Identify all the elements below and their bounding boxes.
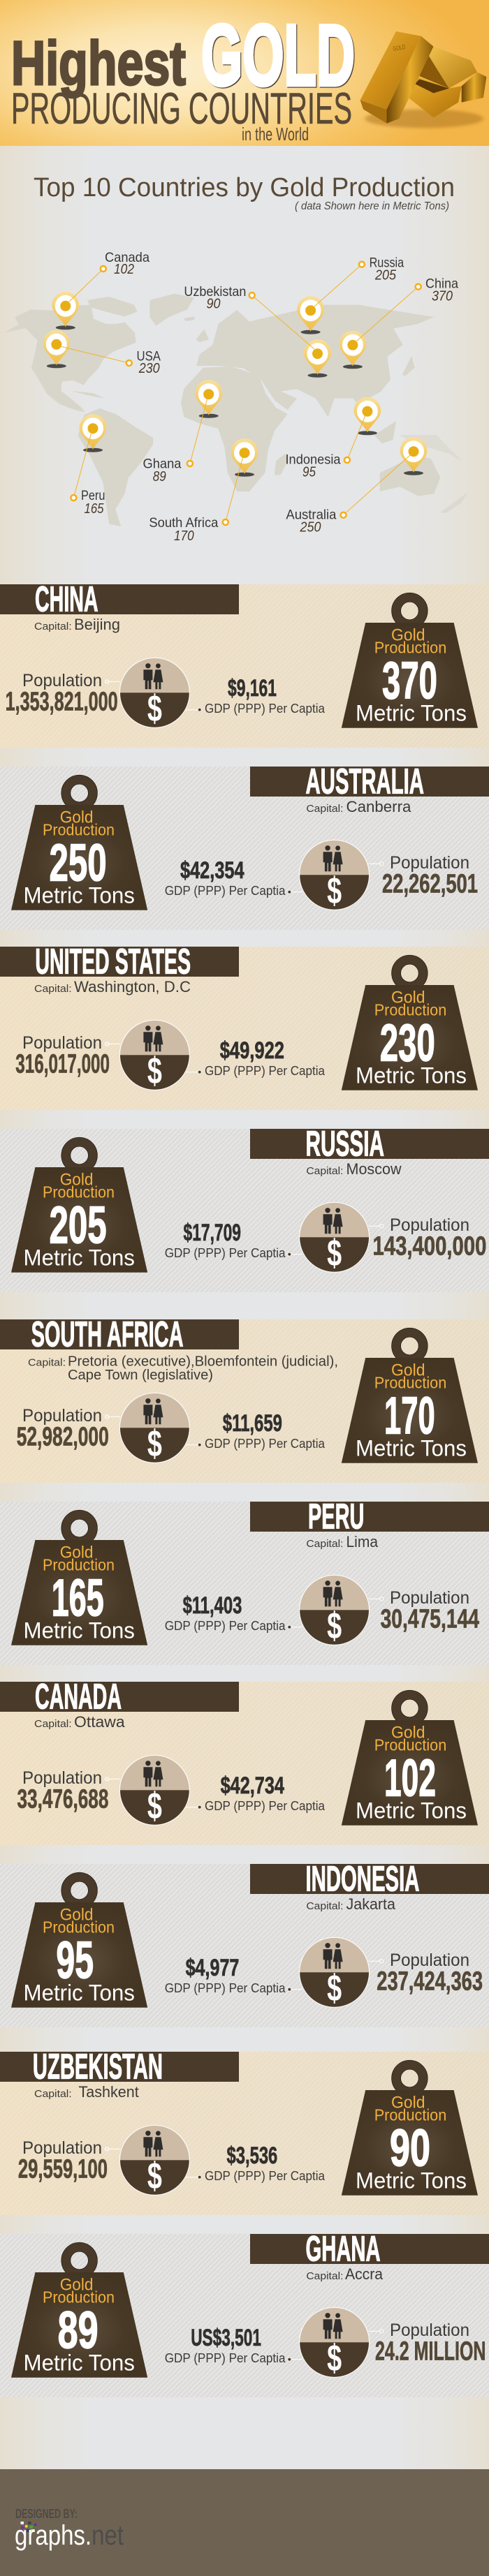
weight: gold production — [11, 1510, 147, 1645]
population: Population — [22, 1406, 102, 1426]
GDP: GDP (PPP) Per Captia — [205, 2169, 326, 2183]
population — [382, 853, 478, 899]
weight: gold production: 230 — [380, 1014, 435, 1072]
chart: population and GDP disc — [119, 2125, 189, 2197]
GDP: $11,659 — [223, 1410, 282, 1437]
heading: Top 10 countries: Top 10 Countries by Gold Production — [34, 173, 455, 202]
panel: Indonesia — [0, 1859, 489, 2027]
title: GOLD: GOLD — [201, 8, 355, 104]
capital: Canberra — [346, 798, 411, 815]
weight: gold production: Metric Tons — [24, 1618, 135, 1643]
chart: population and GDP disc: $ — [327, 1232, 342, 1274]
chart: population and GDP disc — [119, 658, 189, 730]
country name: UNITED STATES — [35, 942, 191, 982]
population — [381, 1588, 479, 1634]
chart: population and GDP disc: $ — [327, 1605, 342, 1647]
pin: Uzbekistan — [184, 284, 331, 378]
weight: gold production: Production — [43, 1918, 115, 1937]
population: Population — [22, 1033, 102, 1053]
pin: Peru — [71, 414, 106, 517]
pin: Uzbekistan: 90 — [207, 297, 221, 312]
population: Population — [390, 1588, 469, 1608]
weight: gold production: Gold — [391, 1723, 425, 1742]
GDP — [165, 1592, 286, 1633]
weight: gold production: Gold — [60, 1170, 94, 1189]
panel: Russia — [0, 1124, 489, 1292]
GDP — [165, 2325, 286, 2365]
population: Population — [22, 1768, 102, 1788]
weight: gold production: Metric Tons — [24, 1245, 135, 1271]
chart: population and GDP disc: $ — [147, 2155, 162, 2197]
panel: Uzbekistan — [0, 2047, 489, 2215]
weight: gold production: 170 — [384, 1386, 435, 1445]
chart: population and GDP disc: $ — [327, 870, 342, 912]
pin: Indonesia: 95 — [302, 465, 316, 480]
pin: Peru: Peru — [81, 488, 105, 503]
capital: Capital: — [34, 1718, 72, 1730]
pin: South Africa: South Africa — [149, 515, 219, 531]
capital: Beijing — [74, 616, 120, 633]
population: 1,353,821,000 — [6, 687, 118, 716]
map pins — [43, 250, 458, 544]
capital — [306, 2265, 384, 2283]
pin: Canada — [52, 250, 149, 330]
title: in the World: in the World — [242, 124, 309, 145]
weight: gold production: 370 — [382, 651, 437, 710]
GDP: GDP (PPP) Per Captia — [205, 1799, 326, 1813]
population: Population — [390, 853, 469, 873]
capital: Accra — [345, 2265, 384, 2283]
pin: China — [339, 276, 458, 369]
chart: population and GDP disc — [300, 1937, 370, 2009]
capital — [34, 2083, 139, 2101]
capital: Capital: — [34, 621, 72, 632]
weight: gold production — [342, 955, 478, 1090]
capital — [34, 616, 120, 633]
pin: Indonesia: Indonesia — [285, 452, 341, 467]
pin: Australia: Australia — [286, 507, 337, 522]
pin: Indonesia — [285, 397, 381, 480]
weight: gold production: Metric Tons — [356, 2168, 467, 2193]
population: 316,017,000 — [15, 1050, 110, 1079]
logo pixels — [21, 2522, 36, 2532]
GDP — [165, 1955, 286, 1995]
weight: gold production: Metric Tons — [356, 701, 467, 726]
capital — [34, 1713, 125, 1731]
population: Population — [390, 1950, 469, 1970]
GDP: GDP (PPP) Per Captia — [165, 1619, 286, 1633]
chart: population and GDP disc: $ — [147, 1050, 162, 1092]
GDP — [205, 1037, 326, 1078]
GDP: GDP (PPP) Per Captia — [205, 1064, 326, 1078]
weight: gold production: 205 — [49, 1196, 107, 1254]
chart: population and GDP disc: $ — [327, 1967, 342, 2009]
weight: gold production: Gold — [60, 1543, 94, 1562]
capital: Capital: — [34, 983, 72, 995]
GDP: $17,709 — [183, 1220, 241, 1246]
pin: China: 370 — [432, 289, 453, 304]
weight: gold production — [11, 1137, 147, 1273]
population: Population — [22, 2138, 102, 2158]
header banner — [0, 0, 489, 146]
weight: gold production — [342, 1690, 478, 1826]
footer — [0, 2469, 489, 2576]
weight: gold production — [11, 1872, 147, 2008]
chart: population and GDP disc: $ — [147, 688, 162, 730]
capital: Cape Town (legislative) — [68, 1368, 213, 1383]
population: 29,559,100 — [18, 2154, 108, 2184]
weight: gold production: Production — [374, 1735, 446, 1754]
GDP — [165, 1220, 286, 1260]
chart: population and GDP disc: $ — [147, 1785, 162, 1827]
logo wordmark: graphs.net — [15, 2520, 124, 2551]
weight: gold production: Gold — [60, 808, 94, 827]
weight: gold production: Gold — [391, 988, 425, 1007]
GDP — [205, 1772, 326, 1813]
weight: gold production: Production — [43, 2288, 115, 2307]
country name: CANADA — [35, 1677, 122, 1717]
pin: Canada: 102 — [114, 262, 134, 277]
weight: gold production: Metric Tons — [24, 1981, 135, 2006]
panel: Peru — [0, 1497, 489, 1665]
pin: South Africa: 170 — [174, 528, 194, 544]
capital: Jakarta — [346, 1895, 396, 1913]
pin: Uzbekistan: Uzbekistan — [184, 284, 246, 299]
GDP: GDP (PPP) Per Captia — [165, 884, 286, 898]
weight: gold production: Production — [374, 1001, 446, 1019]
weight: gold production — [342, 2060, 478, 2196]
chart: population and GDP disc — [119, 1755, 189, 1827]
country name: CHINA — [35, 579, 98, 619]
GDP: US$3,501 — [191, 2325, 261, 2351]
capital — [306, 798, 411, 815]
chart: population and GDP disc — [119, 1393, 189, 1465]
weight: gold production: Metric Tons — [356, 1063, 467, 1088]
weight: gold production — [342, 593, 478, 728]
weight: gold production: Metric Tons — [356, 1436, 467, 1461]
weight: gold production: Metric Tons — [356, 1798, 467, 1823]
GDP: GDP (PPP) Per Captia — [205, 702, 326, 716]
pin: South Africa — [149, 438, 258, 544]
pin: Ghana — [143, 380, 222, 484]
population — [373, 1215, 486, 1261]
capital: Moscow — [346, 1160, 402, 1178]
weight: gold production: Metric Tons — [24, 2351, 135, 2376]
capital: Capital: — [306, 1165, 343, 1177]
GDP: GDP (PPP) Per Captia — [165, 1246, 286, 1260]
GDP: $11,403 — [183, 1592, 242, 1619]
subheading: ( data Shown here in Metric Tons) — [295, 200, 449, 212]
capital — [28, 1354, 338, 1383]
population — [6, 671, 118, 716]
world map — [3, 294, 468, 526]
pin: Peru: 165 — [84, 501, 104, 517]
designed by label: DESIGNED BY: — [15, 2507, 78, 2521]
capital: Tashkent — [78, 2083, 139, 2101]
weight: gold production: 95 — [56, 1931, 94, 1990]
weight: gold production: Gold — [391, 1361, 425, 1379]
bar stamp: GOLD — [393, 43, 406, 52]
population — [17, 1406, 109, 1452]
pin: Russia: Russia — [370, 256, 404, 271]
capital — [306, 1895, 396, 1913]
weight: gold production: Gold — [391, 626, 425, 644]
title: Highest: Highest — [11, 28, 186, 98]
weight: gold production: 102 — [384, 1749, 436, 1807]
capital — [306, 1160, 402, 1178]
GDP: $4,977 — [186, 1955, 239, 1981]
country name: PERU — [308, 1497, 364, 1537]
capital: Ottawa — [74, 1713, 125, 1731]
country name: RUSSIA — [306, 1124, 384, 1164]
weight: gold production: Production — [374, 1374, 446, 1392]
pin: Russia: 205 — [374, 268, 397, 283]
weight: gold production — [11, 775, 147, 910]
weight: gold production: Gold — [391, 2093, 425, 2112]
population — [375, 2320, 486, 2367]
chart: population and GDP disc — [300, 840, 370, 912]
weight: gold production: Production — [43, 1183, 115, 1201]
population — [377, 1950, 483, 1997]
pin: Russia — [297, 256, 404, 334]
chart: population and GDP disc: $ — [147, 1423, 162, 1465]
GDP — [165, 857, 286, 898]
capital: Pretoria (executive),Bloemfontein (judicial), — [68, 1354, 338, 1370]
population: Population — [22, 671, 102, 690]
population: Population — [390, 2320, 469, 2340]
weight: gold production — [11, 2242, 147, 2378]
weight: gold production: Production — [43, 821, 115, 839]
GDP: GDP (PPP) Per Captia — [205, 1437, 326, 1451]
weight: gold production — [342, 1328, 478, 1463]
weight: gold production: 89 — [58, 2301, 98, 2360]
GDP — [205, 2142, 326, 2183]
population — [17, 1768, 108, 1814]
panel: United States — [0, 942, 489, 1110]
pin: Ghana: Ghana — [143, 457, 182, 472]
pin: USA — [43, 330, 161, 376]
pin: USA: USA — [137, 349, 161, 364]
capital: Capital: — [306, 1538, 343, 1550]
capital — [306, 1533, 379, 1550]
capital: Washington, D.C — [74, 978, 191, 995]
pin: Canada: Canada — [105, 250, 149, 265]
country name: GHANA — [306, 2229, 381, 2269]
GDP: GDP (PPP) Per Captia — [165, 1981, 286, 1995]
GDP: $42,354 — [180, 857, 245, 884]
pin: Australia: 250 — [300, 520, 321, 535]
population: Population — [390, 1215, 469, 1235]
capital: Lima — [346, 1533, 379, 1550]
pin: USA: 230 — [138, 361, 160, 376]
chart: population and GDP disc — [300, 1202, 370, 1274]
GDP: $42,734 — [221, 1772, 284, 1799]
panel: China — [0, 579, 489, 748]
icon: gold bars — [360, 31, 486, 128]
weight: gold production: Metric Tons — [24, 883, 135, 908]
pin: Ghana: 89 — [153, 469, 166, 484]
GDP: GDP (PPP) Per Captia — [165, 2351, 286, 2365]
pin: China: China — [425, 276, 458, 292]
GDP: $3,536 — [226, 2142, 277, 2169]
population: 52,982,000 — [17, 1423, 109, 1452]
chart: population and GDP disc: $ — [327, 2337, 342, 2379]
weight: gold production: Gold — [60, 2275, 94, 2294]
weight: gold production: Gold — [60, 1905, 94, 1924]
GDP: $49,922 — [220, 1037, 284, 1064]
population: 33,476,688 — [17, 1784, 108, 1814]
capital: Capital: — [306, 1900, 343, 1912]
GDP — [205, 1410, 326, 1451]
panel: Australia — [0, 762, 489, 930]
chart: population and GDP disc — [300, 2307, 370, 2379]
capital: Capital: — [28, 1357, 66, 1369]
weight: gold production: Production — [374, 2105, 446, 2124]
population — [18, 2138, 108, 2184]
panel: South Africa — [0, 1315, 489, 1483]
country name: SOUTH AFRICA — [31, 1315, 183, 1354]
GDP — [205, 675, 326, 716]
country name: UZBEKISTAN — [33, 2047, 163, 2087]
weight: gold production: 250 — [49, 834, 107, 892]
GDP: $9,161 — [228, 675, 277, 702]
weight: gold production: 165 — [52, 1569, 104, 1627]
weight: gold production: Production — [374, 638, 446, 656]
panel: Canada — [0, 1677, 489, 1845]
pin: Australia — [286, 437, 428, 535]
capital: Capital: — [306, 2270, 343, 2282]
population — [15, 1033, 110, 1079]
weight: gold production: Production — [43, 1555, 115, 1574]
capital: Capital: — [306, 803, 343, 815]
weight: gold production: 90 — [390, 2119, 430, 2177]
panel: Ghana — [0, 2229, 489, 2397]
capital: Capital: — [34, 2088, 72, 2100]
chart: population and GDP disc — [300, 1575, 370, 1647]
chart: population and GDP disc — [119, 1020, 189, 1092]
